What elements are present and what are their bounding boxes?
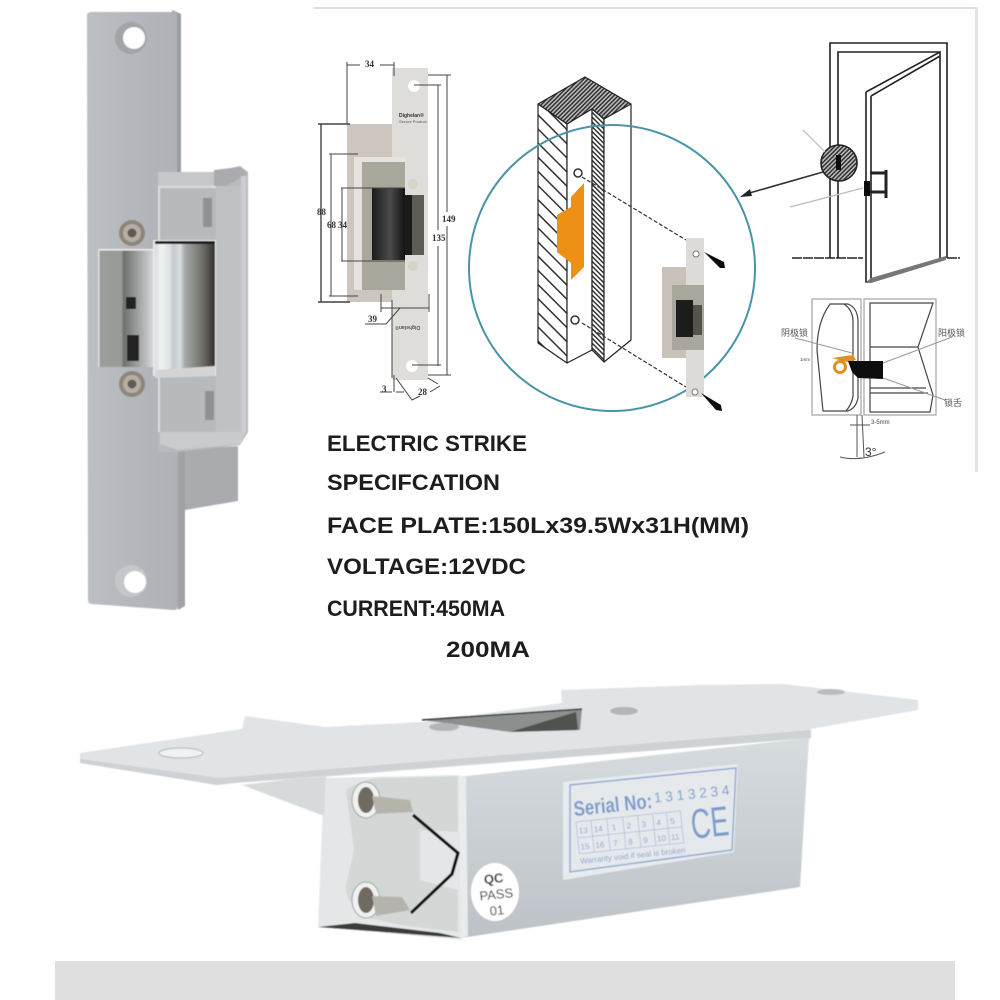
handle [864, 181, 870, 196]
diagram: door frame installation [469, 77, 755, 411]
pillar [538, 77, 631, 363]
bracket [347, 124, 392, 302]
footer band [55, 961, 955, 1000]
magnifier circle [469, 125, 755, 411]
leader lines [790, 130, 863, 207]
QC sticker: PASS [479, 885, 514, 904]
code grid [576, 811, 684, 854]
diagram: strike with dimensions: 149 [442, 214, 456, 224]
door leaf [866, 52, 946, 282]
lower back block [177, 446, 238, 510]
face plate [87, 12, 178, 610]
serial label: 3 [641, 820, 647, 829]
arrow [746, 172, 823, 194]
face plate [392, 68, 428, 380]
labels: 阴极锁 [781, 327, 808, 338]
serial label: 11 [671, 832, 680, 842]
serial label: 10 [657, 834, 667, 844]
diagram: strike with dimensions: 68 [327, 220, 336, 230]
screw holes [574, 169, 582, 177]
dimension lines [318, 62, 451, 400]
screws [704, 252, 725, 268]
serial label: 1313234 [653, 782, 730, 806]
face plate [80, 684, 918, 785]
heading: specification text: FACE PLATE:150Lx39.5Wx31H(MM) [327, 513, 749, 538]
diagram: latch section: 3° [865, 445, 877, 459]
serial label: 15 [580, 842, 590, 852]
boxes [812, 299, 861, 415]
frame [830, 43, 947, 258]
dark latch side [405, 195, 424, 255]
serial label: 1 [611, 823, 617, 832]
serial label: 8 [628, 837, 634, 847]
diagram: strike with dimensions: 88 [317, 207, 326, 217]
diagram: strike with dimensions: Dighelan® [395, 324, 420, 331]
strike box [158, 166, 248, 452]
diagram: latch section [781, 299, 965, 459]
opening [422, 709, 582, 732]
diagram: strike with dimensions: 34 [338, 220, 348, 230]
heading: specification text: ELECTRIC STRIKE [327, 431, 527, 456]
diagram: latch section: 阳极锁 [938, 327, 965, 338]
serial label [563, 764, 738, 880]
QC sticker: QC [483, 870, 505, 887]
solenoid cylinder [372, 188, 405, 260]
small strike [662, 238, 704, 397]
floor [792, 257, 960, 259]
serial label: 4 [656, 818, 662, 828]
serial label: 5 [670, 817, 676, 826]
serial label: 9 [643, 836, 649, 845]
serial label: 16 [595, 840, 605, 850]
mounting hole top [115, 22, 147, 54]
panel: technical drawing border [313, 7, 978, 472]
cathode lock orange [832, 355, 856, 372]
diagram: strike with dimensions: Secure Product [399, 119, 427, 124]
detail circle [821, 145, 857, 181]
serial label: 7 [613, 839, 619, 848]
diagram: strike with dimensions: 135 [432, 233, 446, 243]
dashed guides [582, 177, 686, 387]
mortise cut-out [557, 183, 584, 280]
heading: specification text [327, 431, 749, 662]
heading: specification text: VOLTAGE:12VDC [327, 554, 526, 579]
latch [153, 240, 216, 378]
dimension values: 34 [365, 59, 374, 69]
serial label: Warranty void if seal is broken [580, 846, 686, 866]
serial label: 14 [593, 824, 604, 834]
screw bottom [119, 371, 145, 397]
diagram: strike with dimensions: 28 [418, 387, 428, 397]
side edge of face plate [172, 10, 181, 172]
diagram: strike with dimensions: 3 [382, 384, 387, 394]
leaders [795, 337, 952, 400]
terminal block [346, 776, 458, 932]
window [98, 249, 154, 367]
photo: electric strike front view [87, 10, 248, 610]
diagram: latch section: 3-5mm [871, 420, 890, 426]
brand marks: Dighelan® [399, 112, 424, 119]
photo: electric strike rear view [80, 684, 918, 940]
heading: specification text: SPECIFCATION [327, 470, 500, 495]
screw top [119, 220, 145, 246]
QC sticker: 01 [489, 902, 505, 919]
heading: specification text: 200MA [446, 637, 530, 662]
mounting hole bottom [115, 565, 147, 597]
plate holes [159, 748, 203, 758]
clearance lines [840, 415, 885, 459]
diagram: strike with dimensions: 39 [368, 314, 378, 324]
frame profile [870, 303, 933, 412]
door profile [817, 304, 858, 411]
inner housing [354, 157, 405, 290]
serial label: CE [688, 797, 731, 848]
diagram: strike with dimensions [317, 59, 456, 400]
holes [408, 80, 420, 92]
body [458, 738, 809, 938]
side tab [242, 775, 326, 816]
wires [411, 815, 458, 913]
diagram: latch section: 1mm [800, 357, 810, 362]
QC sticker [471, 863, 519, 921]
serial label: 2 [626, 821, 632, 831]
diagram: latch section: 锁舌 [944, 397, 962, 408]
heading: specification text: CURRENT:450MA [327, 596, 505, 621]
serial label: 13 [578, 826, 589, 836]
diagram: door elevation [740, 43, 960, 283]
bracket side [318, 775, 462, 940]
serial label: Serial No: [572, 790, 653, 821]
tongue [848, 361, 883, 379]
